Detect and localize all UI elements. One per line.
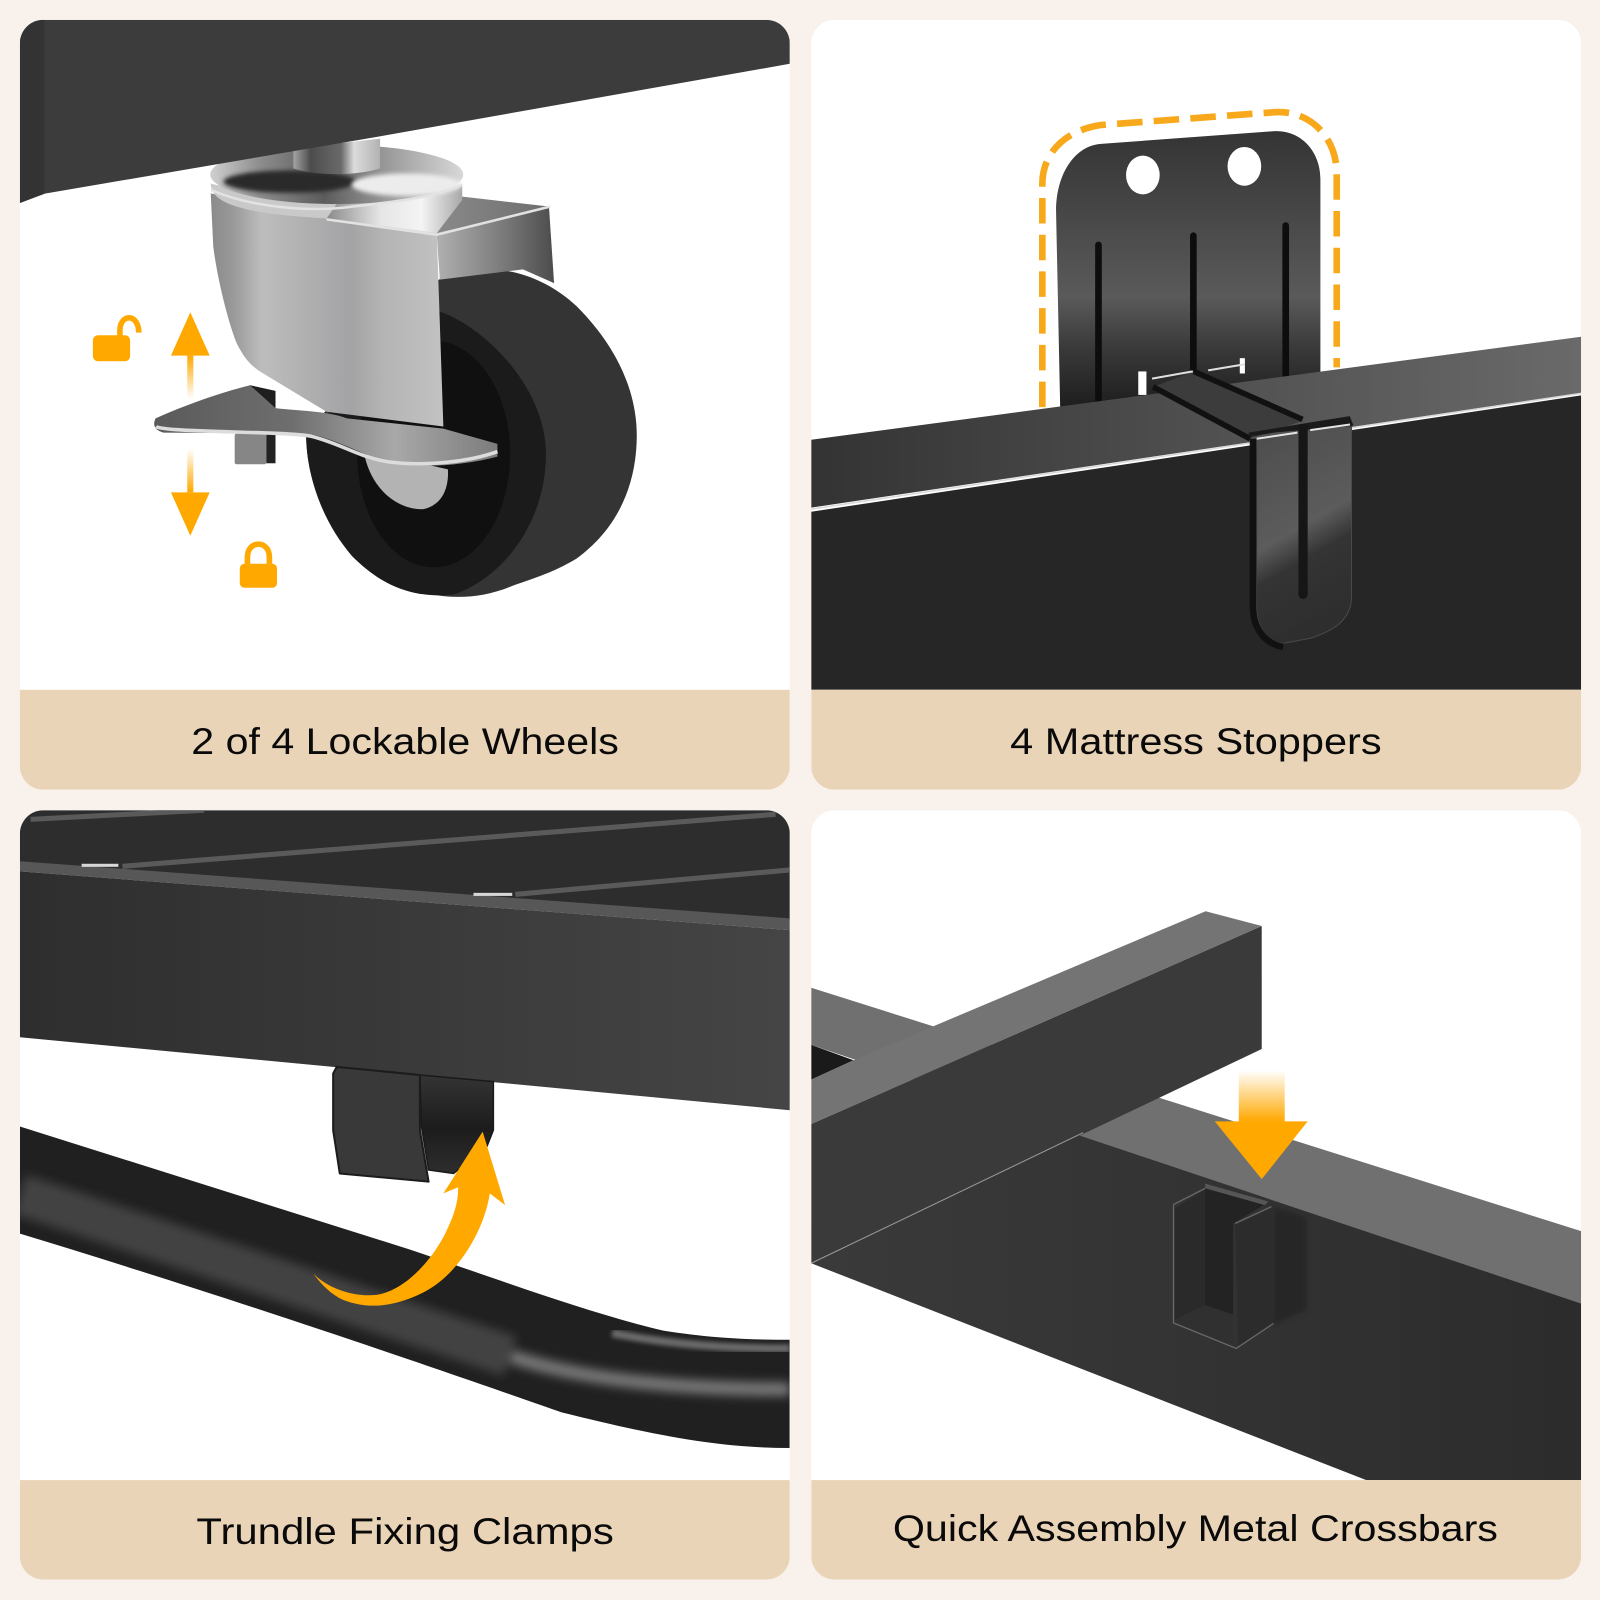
dashed highlight outline (1042, 112, 1337, 407)
bed frame rail (20, 20, 790, 203)
silver bracket body (211, 193, 443, 427)
stopper clip top strap (1152, 364, 1303, 439)
brake peg (235, 434, 276, 464)
top dome, rings and stud (210, 139, 550, 235)
caption: lockable wheels (20, 690, 790, 790)
caption: mattress stoppers: 4 Mattress Stoppers (1010, 721, 1382, 762)
icon: closed lock (240, 544, 277, 588)
caption: quick assembly metal crossbars: Quick Assembly Metal Crossbars (893, 1508, 1498, 1549)
frame front face (20, 871, 790, 1110)
brake pedal (154, 385, 497, 466)
panel background (812, 810, 1581, 1480)
arrow: pedal up (171, 312, 210, 399)
curved arrow (313, 1132, 505, 1306)
wheel (306, 269, 637, 597)
dark notch (811, 1045, 854, 1080)
caption: lockable wheels: 2 of 4 Lockable Wheels (191, 721, 619, 762)
bar front face (811, 395, 1581, 690)
arrow: down (1215, 1070, 1308, 1179)
slot gaps (1138, 358, 1245, 395)
trundle tube (20, 1116, 790, 1463)
crossbar lower edge (811, 1133, 1083, 1263)
panel: quick assembly crossbars (811, 810, 1581, 1580)
slat weld glints (82, 864, 512, 896)
caption: trundle fixing clamps (20, 1480, 790, 1580)
long bar top face (811, 988, 1581, 1304)
bar highlight edge (811, 393, 1581, 509)
swivel plate side (437, 207, 554, 283)
slat deck (20, 810, 790, 920)
chrome hub (365, 457, 448, 509)
stopper clip front tab (1249, 418, 1352, 647)
caption: trundle fixing clamps: Trundle Fixing Clamps (196, 1511, 614, 1552)
long bar front face (811, 1127, 1581, 1480)
panel: lockable wheels (20, 20, 790, 790)
panel: mattress stoppers (811, 20, 1581, 790)
clamp (333, 1067, 493, 1182)
arrow: pedal down (171, 449, 210, 536)
panel: trundle fixing clamps (20, 810, 790, 1580)
panel background (20, 1038, 790, 1480)
stopper plate (1056, 131, 1320, 408)
U bracket (1173, 1184, 1307, 1348)
frame top edge (20, 861, 790, 930)
bar top surface (811, 337, 1581, 508)
panel background (20, 64, 790, 690)
panel background (812, 20, 1581, 512)
caption: mattress stoppers (811, 690, 1581, 790)
crossbar side face (811, 926, 1262, 1263)
icon: open lock (93, 318, 139, 361)
caption: quick assembly metal crossbars (811, 1480, 1581, 1580)
swivel plate top (382, 196, 547, 233)
crossbar top face (811, 911, 1262, 1124)
